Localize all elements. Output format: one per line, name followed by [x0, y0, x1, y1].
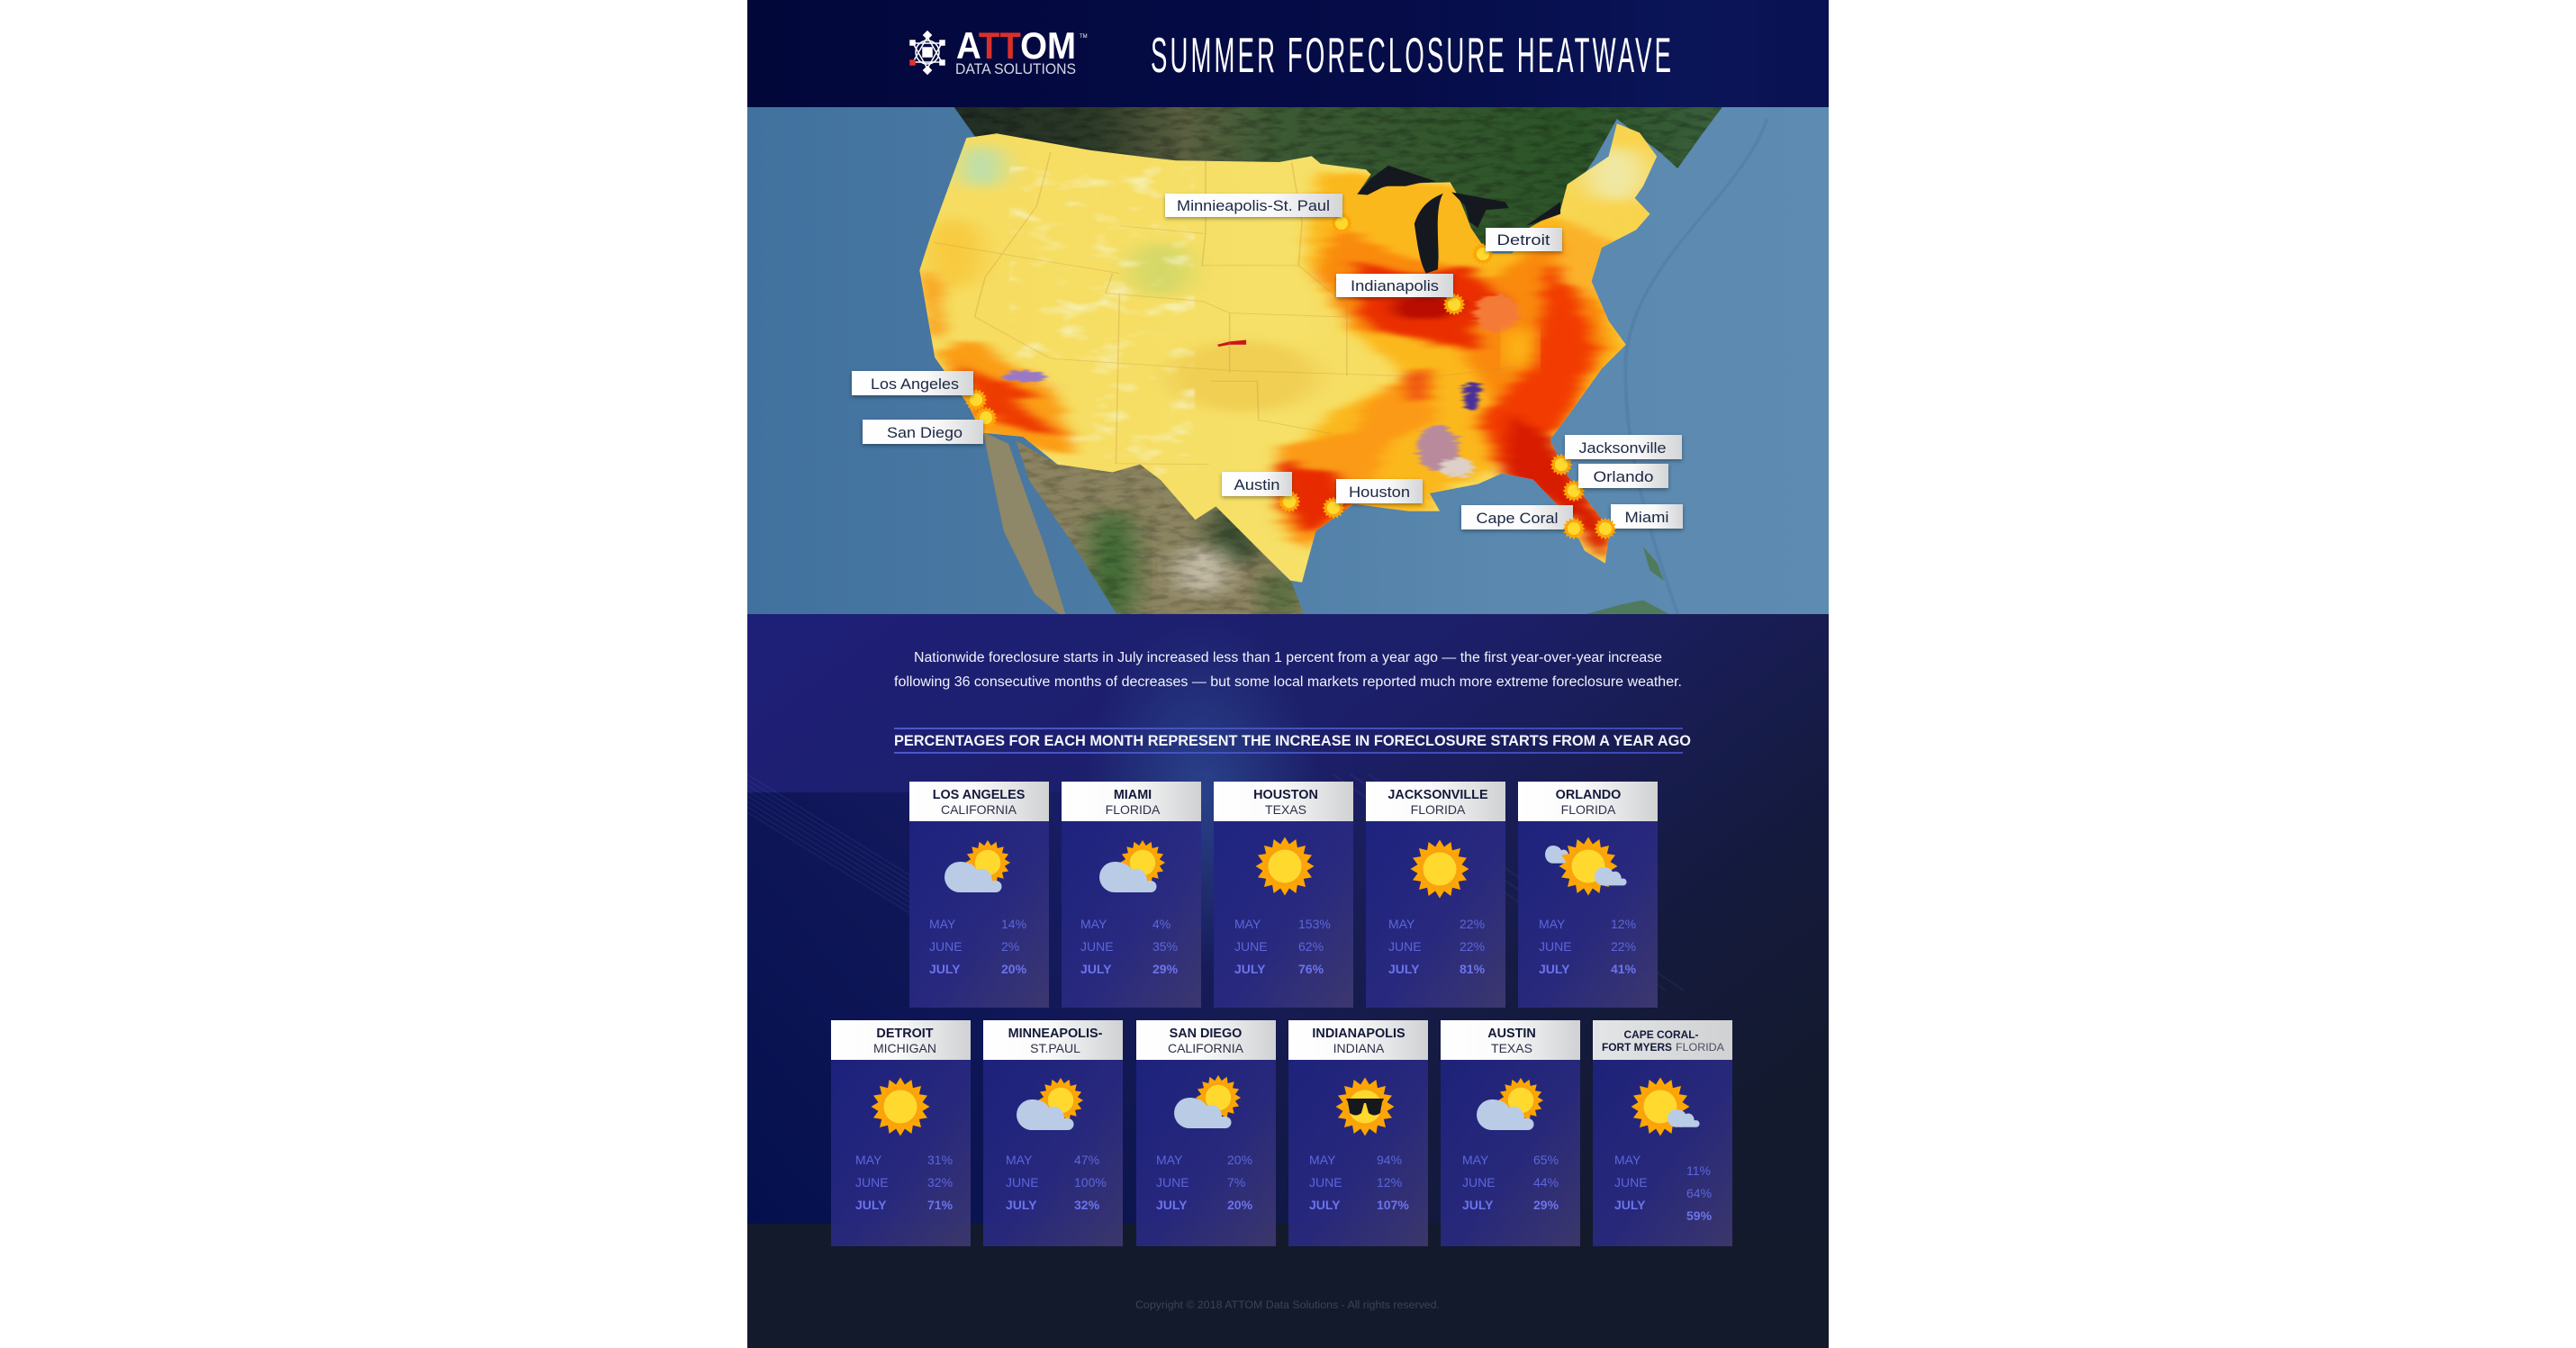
card: San Diego: CALIFORNIA — [1168, 1041, 1244, 1055]
card: Austin: 29% — [1533, 1198, 1559, 1212]
map label: Austin — [1222, 472, 1292, 496]
map label: Indianapolis — [1336, 274, 1453, 297]
card: Houston: MAY — [1234, 917, 1261, 931]
Great Lakes — [1357, 166, 1560, 274]
logo: ATTOM Data Solutions: TM — [1080, 34, 1088, 40]
card: Orlando: JUNE — [1539, 939, 1572, 954]
card: Indianapolis: 12% — [1377, 1175, 1402, 1190]
card: Minneapolis-St. Paul: 32% — [1074, 1198, 1100, 1212]
map marker: Cape Coral — [1562, 517, 1586, 540]
card: San Diego — [1136, 1020, 1276, 1246]
card: Miami: 29% — [1152, 962, 1179, 976]
card: Minneapolis-St. Paul — [983, 1020, 1123, 1246]
map label: Jacksonville — [1565, 435, 1682, 459]
card: Indianapolis: 94% — [1377, 1153, 1402, 1167]
map label: Minneapolis-St. Paul — [1165, 194, 1342, 217]
orange regions — [919, 170, 1630, 551]
card: Orlando: 41% — [1611, 962, 1637, 976]
card: Jacksonville — [1366, 782, 1505, 1008]
map label: Los Angeles — [852, 371, 973, 395]
card: Minneapolis-St. Paul: MAY — [1006, 1153, 1033, 1167]
card: Miami: 4% — [1152, 917, 1170, 931]
card: San Diego: 20% — [1227, 1153, 1252, 1167]
icon: sun with sunglasses — [1336, 1077, 1394, 1136]
card: Miami: MAY — [1080, 917, 1107, 931]
card: Detroit — [831, 1020, 971, 1246]
card: Cape Coral-Fort Myers: JUNE — [1614, 1175, 1648, 1190]
card: Jacksonville: MAY — [1388, 917, 1415, 931]
section heading with rules: PERCENTAGES FOR EACH MONTH REPRESENT THE INCREASE IN FORECLOSURE STARTS FROM A YEAR AGO — [894, 733, 1691, 749]
map marker: Indianapolis — [1442, 293, 1466, 316]
red regions — [961, 261, 1610, 564]
card: Minneapolis-St. Paul: 47% — [1074, 1153, 1099, 1167]
map marker: San Diego — [974, 406, 998, 430]
card: Miami: MIAMI — [1114, 788, 1152, 802]
card: Cape Coral-Fort Myers: FORT MYERS — [1602, 1041, 1672, 1054]
map marker: Orlando — [1562, 479, 1586, 502]
card: Orlando: JULY — [1539, 962, 1570, 976]
card: Jacksonville: JULY — [1388, 962, 1420, 976]
map label: Houston — [1336, 479, 1423, 503]
map label: Cape Coral — [1461, 505, 1573, 529]
card: Detroit: JULY — [855, 1198, 887, 1212]
card: Detroit: JUNE — [855, 1175, 889, 1190]
card: Detroit: MAY — [855, 1153, 882, 1167]
card: Cape Coral-Fort Myers: FLORIDA — [1676, 1041, 1724, 1054]
card: Los Angeles: 20% — [1001, 962, 1027, 976]
card: Cape Coral-Fort Myers: MAY — [1614, 1153, 1641, 1167]
card: Detroit: 71% — [927, 1198, 954, 1212]
map marker: Detroit — [1471, 242, 1495, 266]
card: Los Angeles: 14% — [1001, 917, 1026, 931]
Ohio lighter patch — [1475, 294, 1519, 332]
map label: San Diego: San Diego — [887, 424, 963, 441]
card: Cape Coral-Fort Myers — [1593, 1020, 1732, 1246]
map marker: Austin — [1278, 490, 1301, 513]
card: San Diego: JULY — [1156, 1198, 1188, 1212]
map label: San Diego — [863, 420, 983, 444]
card: Los Angeles: JULY — [929, 962, 961, 976]
map marker: Miami — [1594, 517, 1617, 540]
map label: Miami: Miami — [1624, 509, 1669, 526]
card: Indianapolis: MAY — [1309, 1153, 1336, 1167]
icon: sun — [1410, 839, 1469, 899]
card: Los Angeles: CALIFORNIA — [941, 802, 1017, 817]
card: Los Angeles: JUNE — [929, 939, 963, 954]
yellow gap — [1509, 327, 1532, 370]
card: Orlando: 22% — [1611, 939, 1636, 954]
card: Indianapolis: JUNE — [1309, 1175, 1342, 1190]
Atlantic shelf line — [1734, 122, 1765, 178]
card: San Diego: 7% — [1227, 1175, 1245, 1190]
card: Cape Coral-Fort Myers: 59% — [1686, 1208, 1713, 1223]
card: Orlando: 12% — [1611, 917, 1636, 931]
map label: Austin: Austin — [1234, 476, 1280, 493]
map marker: Jacksonville — [1550, 453, 1573, 476]
icon: sun — [872, 1077, 929, 1136]
card: Detroit: DETROIT — [876, 1027, 934, 1041]
Bahamas and Cuba — [1583, 547, 1671, 615]
card: Los Angeles: LOS ANGELES — [933, 788, 1026, 802]
icon: sun behind cloud — [1017, 1078, 1083, 1130]
card: Austin: TEXAS — [1491, 1041, 1532, 1055]
icon: sun with small cloud — [1631, 1077, 1700, 1136]
card: Miami — [1062, 782, 1201, 1008]
card: Austin: JUNE — [1462, 1175, 1496, 1190]
card: Jacksonville: 22% — [1460, 939, 1485, 954]
card: Orlando — [1518, 782, 1658, 1008]
card: Austin: 65% — [1533, 1153, 1559, 1167]
card: Jacksonville: JACKSONVILLE — [1387, 788, 1488, 802]
card: Austin: AUSTIN — [1487, 1027, 1536, 1041]
card: Cape Coral-Fort Myers: 64% — [1686, 1186, 1712, 1200]
map marker: Los Angeles — [964, 388, 988, 412]
card: Miami: JULY — [1080, 962, 1112, 976]
card: Minneapolis-St. Paul: JUNE — [1006, 1175, 1039, 1190]
map label: Miami — [1611, 504, 1683, 529]
intro text: Nationwide foreclosure starts in July increased less than 1 percent from a year ago — the first year-over-year increase — [914, 650, 1662, 665]
card: Austin: 44% — [1533, 1175, 1559, 1190]
card: Jacksonville: JUNE — [1388, 939, 1422, 954]
card: Houston: 62% — [1298, 939, 1324, 954]
card: Indianapolis: INDIANAPOLIS — [1312, 1027, 1406, 1041]
map label: Indianapolis: Indianapolis — [1351, 277, 1439, 294]
icon: sun — [1255, 837, 1315, 895]
card: Orlando: MAY — [1539, 917, 1566, 931]
card: Cape Coral-Fort Myers: CAPE CORAL- — [1624, 1028, 1698, 1041]
card: Austin: MAY — [1462, 1153, 1489, 1167]
card: San Diego: MAY — [1156, 1153, 1183, 1167]
Baja California — [983, 432, 1066, 615]
card: Houston: 153% — [1298, 917, 1331, 931]
card: Indianapolis: INDIANA — [1333, 1041, 1385, 1055]
icon: sun behind cloud — [1099, 840, 1165, 892]
card: Minneapolis-St. Paul: JULY — [1006, 1198, 1037, 1212]
card: Detroit: 31% — [927, 1153, 953, 1167]
title: SUMMER FORECLOSURE HEATWAVE — [1151, 29, 1671, 84]
card: Orlando: ORLANDO — [1556, 788, 1621, 802]
panel: heat map of the United States — [747, 107, 1829, 626]
card: Houston: JULY — [1234, 962, 1266, 976]
small red patch — [1217, 340, 1246, 347]
panel: lower background — [747, 614, 1829, 1348]
card: Houston: JUNE — [1234, 939, 1268, 954]
logo: ATTOM Data Solutions — [910, 24, 1088, 77]
map label: Orlando — [1578, 464, 1668, 488]
card: Cape Coral-Fort Myers: JULY — [1614, 1198, 1646, 1212]
card: Indianapolis — [1288, 1020, 1428, 1246]
card: Houston: HOUSTON — [1253, 788, 1318, 802]
map label: Minneapolis-St. Paul: Minnieapolis-St. Paul — [1177, 197, 1330, 214]
card: Austin — [1441, 1020, 1580, 1246]
map label: Detroit — [1486, 228, 1562, 251]
map label: Houston: Houston — [1349, 484, 1410, 501]
copyright footer: Copyright © 2018 ATTOM Data Solutions - All rights reserved. — [1135, 1300, 1440, 1311]
card: Houston — [1214, 782, 1353, 1008]
card: Jacksonville: FLORIDA — [1411, 802, 1466, 817]
icon: sun behind cloud — [945, 840, 1010, 892]
map label: Cape Coral: Cape Coral — [1477, 510, 1558, 527]
state borders — [934, 152, 1519, 465]
card: Austin: JULY — [1462, 1198, 1494, 1212]
map marker: Houston — [1322, 496, 1345, 520]
card: San Diego: 20% — [1227, 1198, 1253, 1212]
card: Los Angeles: MAY — [929, 917, 956, 931]
map marker: Minneapolis-St. Paul — [1330, 212, 1353, 235]
icon: sun with two clouds — [1545, 837, 1627, 895]
card: Detroit: MICHIGAN — [873, 1041, 936, 1055]
US base layer with heat — [913, 119, 1671, 594]
purple and pink patches — [1003, 371, 1480, 477]
card: Orlando: FLORIDA — [1561, 802, 1616, 817]
card: Houston: TEXAS — [1265, 802, 1306, 817]
icon: atom logo mark — [910, 32, 945, 74]
card: Houston: 76% — [1298, 962, 1324, 976]
card: Los Angeles — [909, 782, 1049, 1008]
tagline: DATA SOLUTIONS — [955, 61, 1076, 77]
map label: Jacksonville: Jacksonville — [1579, 439, 1666, 457]
icon: sun behind cloud — [1174, 1075, 1241, 1128]
card: Indianapolis: 107% — [1377, 1198, 1409, 1212]
map label: Los Angeles: Los Angeles — [871, 375, 959, 393]
card: Miami: 35% — [1152, 939, 1178, 954]
card: Minneapolis-St. Paul: ST.PAUL — [1030, 1041, 1080, 1055]
card: Detroit: 32% — [927, 1175, 953, 1190]
wordmark: ATTOM — [956, 24, 1076, 67]
card: Indianapolis: JULY — [1309, 1198, 1341, 1212]
map label: Detroit: Detroit — [1496, 231, 1550, 249]
card: Minneapolis-St. Paul: MINNEAPOLIS- — [1008, 1027, 1103, 1041]
card: San Diego: JUNE — [1156, 1175, 1189, 1190]
header band — [747, 0, 1829, 107]
card: Cape Coral-Fort Myers: 11% — [1686, 1163, 1711, 1178]
Mexico mainland — [1016, 440, 1304, 626]
card: San Diego: SAN DIEGO — [1170, 1027, 1242, 1041]
Canada landmass — [954, 107, 1722, 245]
intro text — [894, 650, 1682, 690]
card: Jacksonville: 22% — [1460, 917, 1485, 931]
card: Miami: JUNE — [1080, 939, 1114, 954]
intro text: following 36 consecutive months of decreases — but some local markets reported much more extreme foreclosure weather. — [894, 674, 1682, 690]
pale mountain streaks — [1009, 167, 1195, 475]
icon: sun behind cloud — [1477, 1078, 1543, 1130]
card: Minneapolis-St. Paul: 100% — [1074, 1175, 1107, 1190]
card: Jacksonville: 81% — [1460, 962, 1486, 976]
map label: Orlando: Orlando — [1594, 468, 1653, 485]
card: Los Angeles: 2% — [1001, 939, 1019, 954]
card: Miami: FLORIDA — [1106, 802, 1161, 817]
